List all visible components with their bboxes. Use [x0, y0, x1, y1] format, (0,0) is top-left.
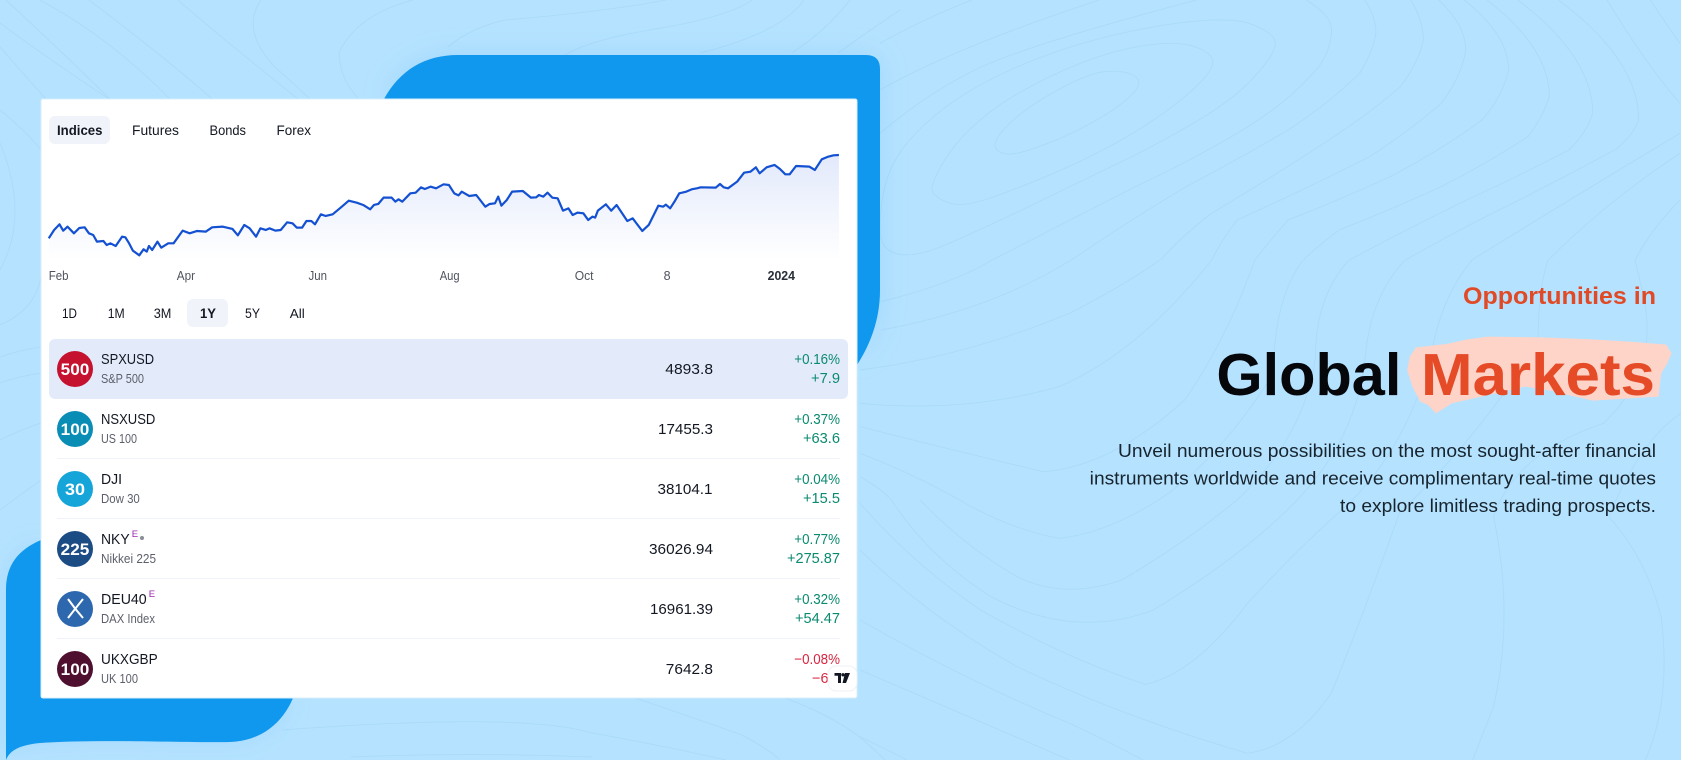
row: DJI: DJI [101, 471, 122, 488]
row: DEU40: E [149, 589, 155, 600]
market category tabs [49, 116, 311, 144]
row: UKXGBP: UKXGBP [101, 651, 158, 668]
row: DEU40: +0.32% [794, 592, 840, 608]
row: UKXGBP: UK 100 [101, 672, 138, 686]
time range selector [62, 299, 305, 327]
chart time axis labels: 2024 [768, 269, 795, 283]
heading: Global Markets: Markets [1421, 342, 1655, 408]
row: NSXUSD: +63.6 [803, 431, 840, 447]
market category tabs: Indices [57, 122, 103, 138]
time range selector: All [290, 306, 305, 321]
row: UKXGBP: −6.41 [812, 671, 849, 687]
market category tabs: Forex [276, 122, 311, 138]
panel: market quotes widget [41, 99, 857, 698]
row: NKY: E [132, 529, 138, 540]
chart time axis labels: Aug [440, 269, 460, 283]
row: SPXUSD (highlighted): +0.16% [794, 352, 840, 368]
row: SPXUSD (highlighted): +7.9 [811, 371, 840, 387]
time range selector: 5Y [245, 305, 261, 321]
chart time axis labels [49, 269, 795, 283]
row: DJI: +15.5 [803, 491, 840, 507]
blue background shape: bottom left [6, 540, 293, 760]
row: DEU40: DEU40 [101, 591, 147, 608]
row: NSXUSD: +0.37% [794, 412, 840, 428]
row: NSXUSD: NSXUSD [101, 411, 155, 428]
row: SPXUSD (highlighted): S&P 500 [101, 372, 144, 386]
chart time axis labels: Oct [575, 269, 594, 283]
row: UKXGBP [57, 651, 849, 687]
row: NKY: Nikkei 225 [101, 552, 156, 566]
row: UKXGBP: 100 [61, 661, 89, 679]
line chart: index over one year [49, 155, 839, 260]
heading: Global Markets: Global [1216, 342, 1401, 408]
chart time axis labels: Apr [177, 269, 195, 283]
row: NKY: NKY [101, 531, 130, 548]
description paragraph: Unveil numerous possibilities on the most sought-after financial [1118, 441, 1656, 461]
description paragraph: to explore limitless trading prospects. [1340, 496, 1656, 516]
subtitle: Opportunities in: Opportunities in [1463, 283, 1656, 310]
market category tabs: Futures [132, 122, 179, 138]
row: DEU40: 16961.39 [650, 601, 713, 618]
time range selector: 1Y [200, 305, 217, 321]
row: UKXGBP: −0.08% [794, 652, 840, 668]
row: NKY: +275.87 [787, 551, 840, 567]
row: NKY: 36026.94 [649, 541, 713, 558]
row: NSXUSD: US 100 [101, 432, 137, 446]
chart time axis labels: 8 [664, 269, 671, 283]
row: NKY: +0.77% [794, 532, 840, 548]
row: DEU40: DAX Index [101, 612, 156, 626]
time range selector: 3M [154, 305, 171, 321]
row: NSXUSD: 100 [61, 421, 89, 439]
row: DJI: 30 [65, 481, 85, 499]
time range selector: 1M [108, 305, 125, 321]
brush highlight behind Markets [1407, 337, 1672, 413]
market category tabs: Bonds [210, 122, 246, 138]
row: SPXUSD (highlighted): SPXUSD [101, 351, 154, 368]
blue background shape: top right [384, 55, 880, 365]
row: SPXUSD (highlighted): 500 [61, 361, 89, 379]
icon: TradingView logo badge [828, 666, 857, 691]
row: DJI: Dow 30 [101, 492, 140, 506]
row: DJI [57, 471, 840, 519]
row: NSXUSD: 17455.3 [658, 421, 713, 438]
description paragraph: instruments worldwide and receive complimentary real-time quotes [1090, 468, 1656, 488]
row: NSXUSD [57, 411, 840, 459]
row: SPXUSD (highlighted) [49, 339, 848, 399]
row: SPXUSD (highlighted): 4893.8 [665, 361, 713, 378]
chart time axis labels: Feb [49, 269, 69, 283]
row: DEU40 [57, 589, 840, 639]
row: DEU40: +54.47 [795, 611, 840, 627]
row: NKY: 225 [61, 541, 89, 559]
description paragraph [1090, 441, 1656, 516]
row: DJI: +0.04% [794, 472, 840, 488]
row: DJI: 38104.1 [658, 481, 712, 498]
time range selector: 1D [62, 305, 77, 321]
heading: Global Markets [1216, 337, 1672, 413]
row: UKXGBP: 7642.8 [666, 661, 713, 678]
row: NKY [57, 529, 840, 579]
chart time axis labels: Jun [308, 269, 327, 283]
